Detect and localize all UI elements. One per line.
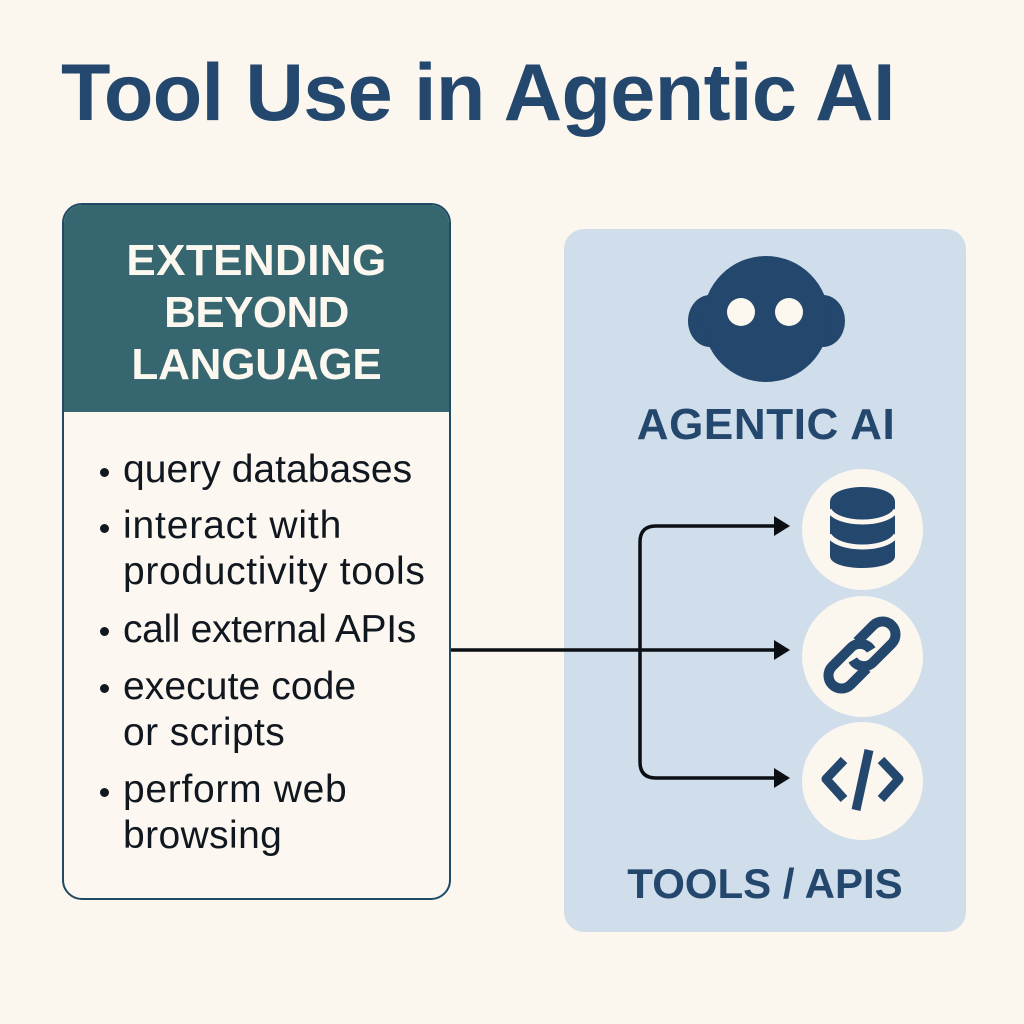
bullet list: browsing: [123, 814, 282, 856]
icon: code: [802, 722, 923, 840]
panel: extending beyond language: [62, 203, 451, 900]
icon: link: [802, 596, 923, 717]
panel heading: LANGUAGE: [131, 340, 382, 389]
icon: robot head: [688, 256, 845, 382]
icon: database: [802, 469, 923, 590]
bullet list: interact with: [123, 504, 342, 546]
bullet list: execute code: [123, 664, 356, 708]
bullet list: or scripts: [123, 710, 285, 754]
title: Tool Use in Agentic AI: [61, 48, 895, 138]
tools label: TOOLS / APIS: [627, 860, 903, 907]
agentic ai label: AGENTIC AI: [637, 400, 895, 449]
bullet list: productivity tools: [123, 550, 426, 592]
bullet list: [100, 448, 426, 856]
bullet list: perform web: [123, 768, 347, 810]
arrows: connector: [451, 516, 790, 788]
panel: agentic ai: [564, 229, 966, 932]
bullet list: query databases: [123, 448, 412, 490]
panel heading: [64, 205, 449, 412]
panel heading: BEYOND: [164, 288, 349, 337]
bullet list: call external APIs: [123, 608, 416, 650]
panel heading: EXTENDING: [126, 236, 387, 285]
